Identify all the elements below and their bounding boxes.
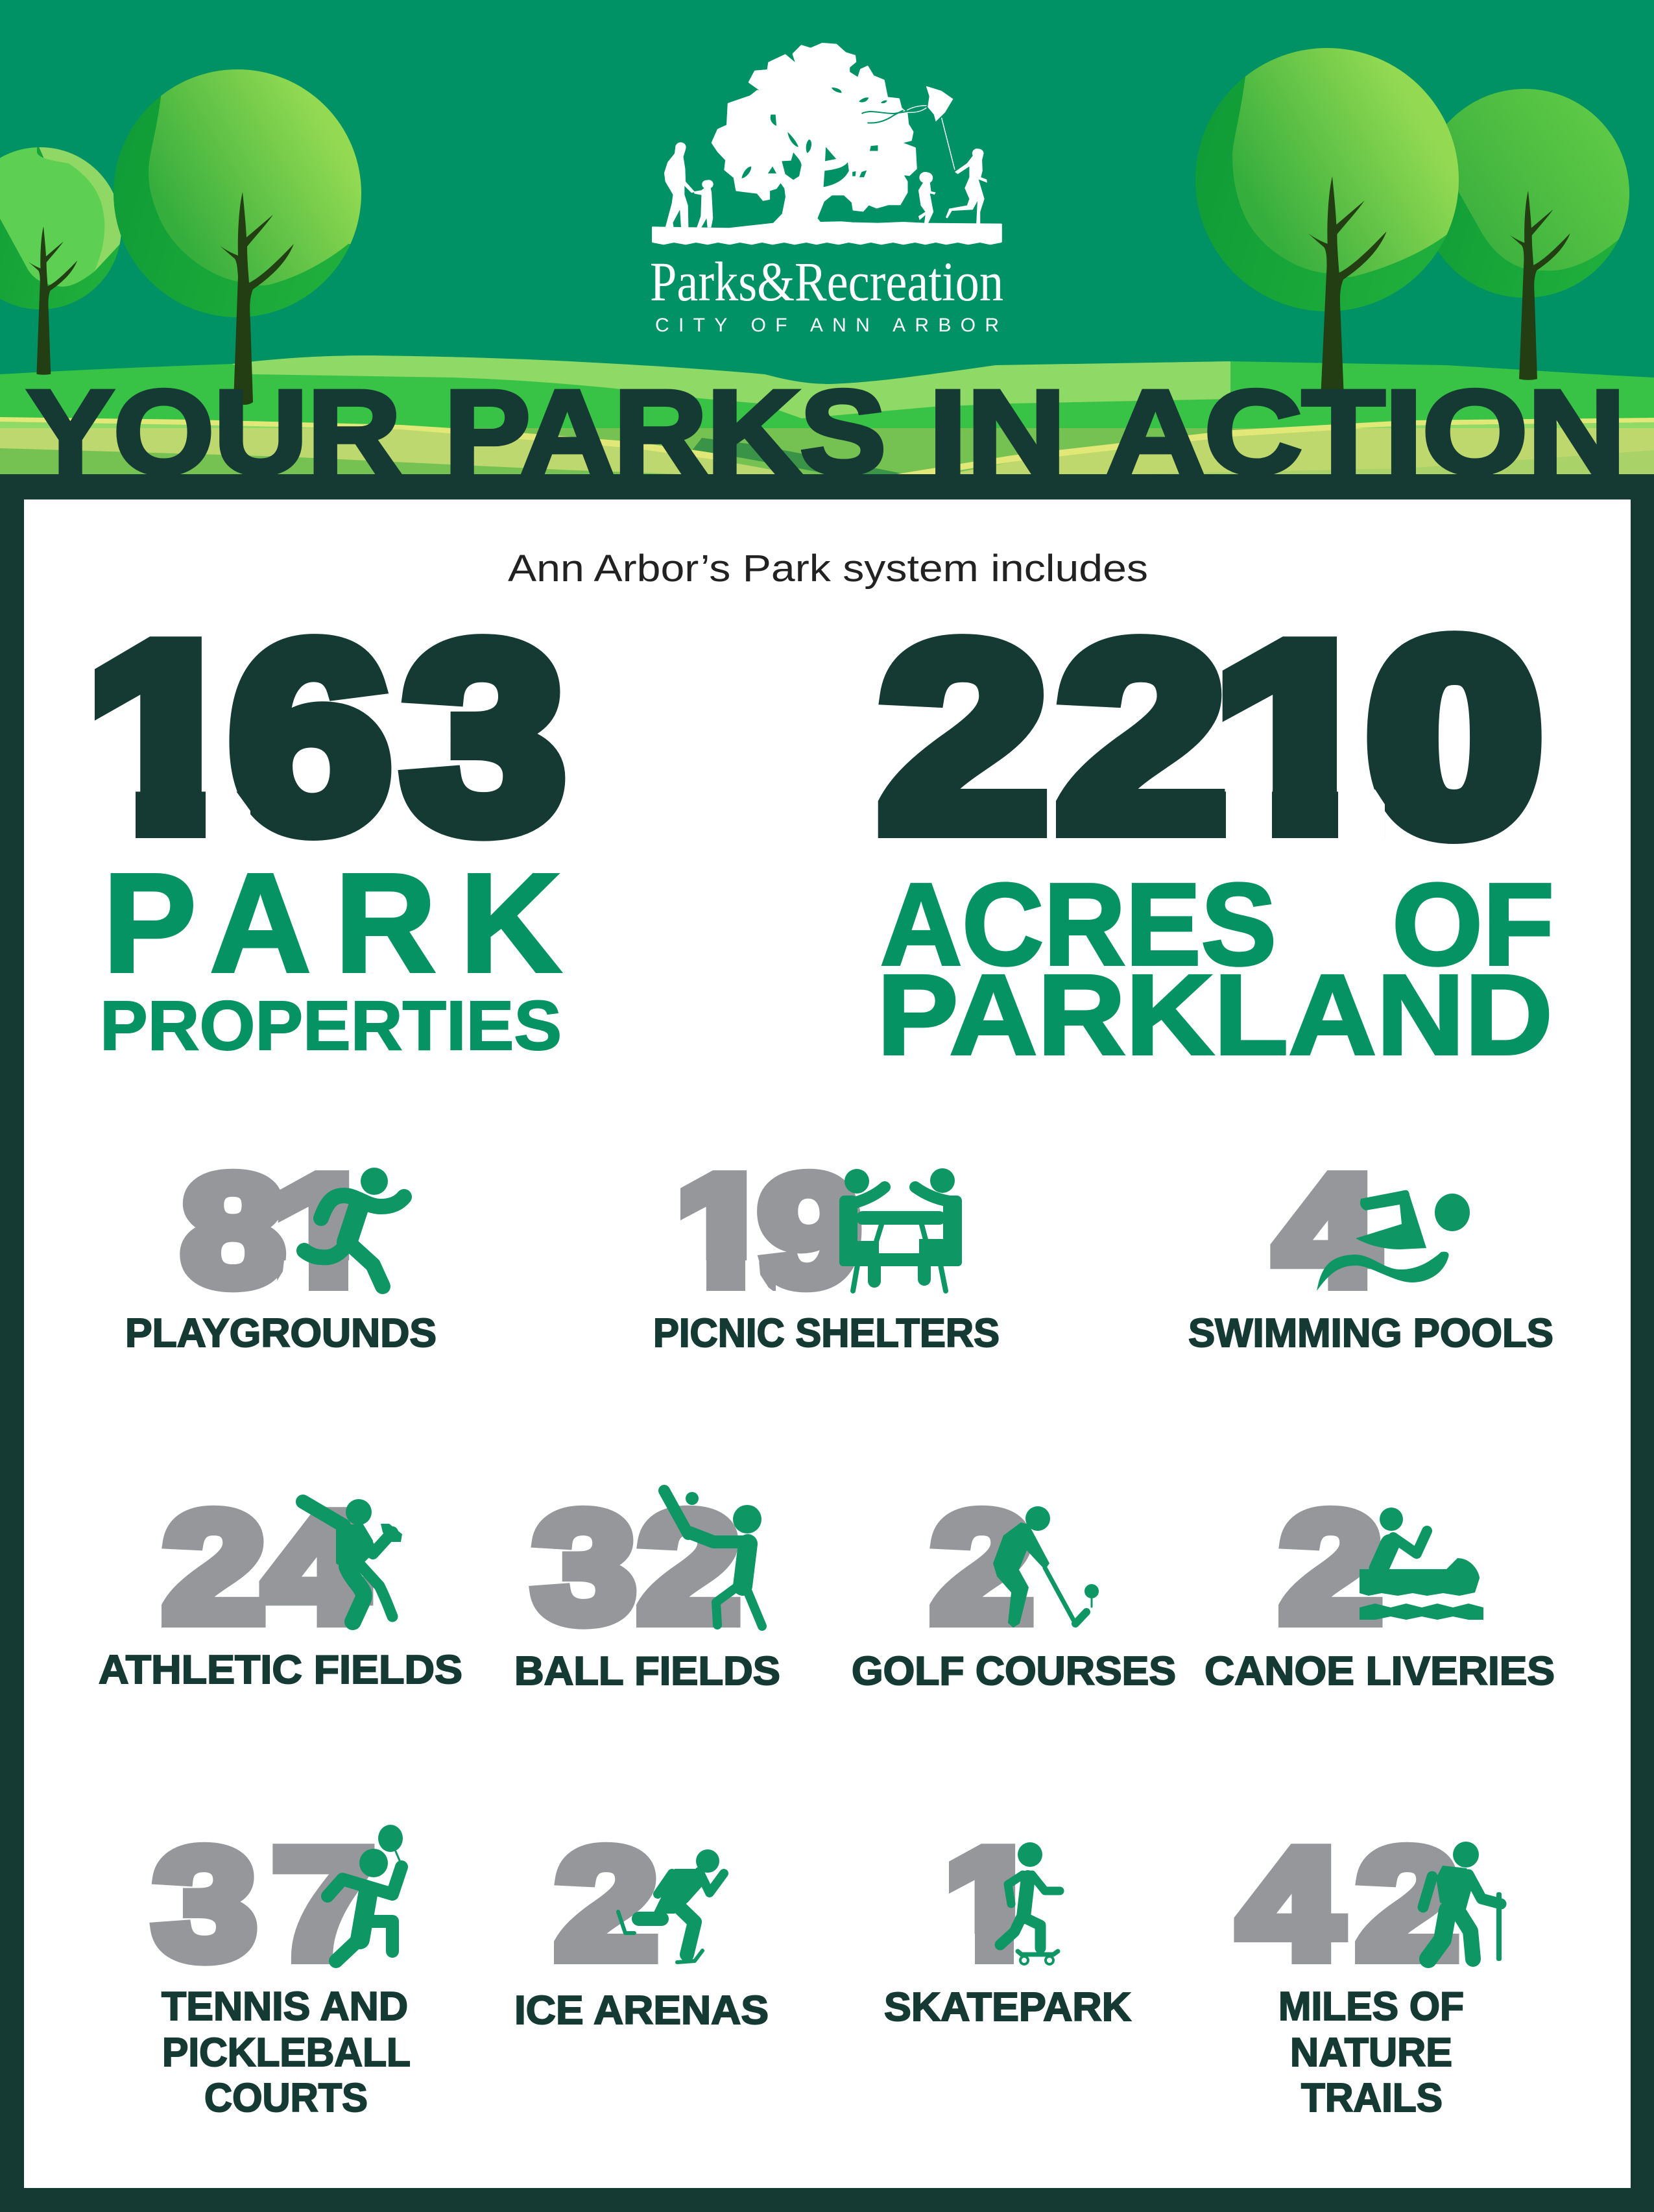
title: YOUR bbox=[27, 365, 401, 498]
label PARK: PARK bbox=[102, 845, 562, 1002]
number: 2 bbox=[1280, 1479, 1382, 1654]
small child silhouette bbox=[694, 180, 713, 228]
frame bbox=[0, 474, 1654, 2212]
icon: swimmer bbox=[1317, 1190, 1470, 1291]
stat: 163 park properties bbox=[65, 589, 565, 1064]
title: IN bbox=[929, 365, 1066, 498]
number: 37 bbox=[154, 1816, 375, 1991]
stat: 2210 acres of parkland bbox=[877, 590, 1554, 1079]
logo illustration: tree and family silhouette bbox=[653, 43, 1001, 244]
white content panel bbox=[24, 499, 1631, 2188]
number: 24 bbox=[163, 1479, 368, 1654]
logo subline: CITY OF ANN ARBOR bbox=[655, 315, 999, 336]
icon: picnic table bbox=[839, 1168, 962, 1291]
stat: 1 skatepark bbox=[884, 1816, 1131, 2030]
digit 1 cleanup bbox=[263, 1260, 396, 1295]
number 163: 163 bbox=[83, 589, 565, 885]
stat: 32 ball fields bbox=[514, 1479, 780, 1694]
stat: 19 picnic shelters bbox=[653, 1142, 1000, 1356]
label: SKATEPARK bbox=[884, 1985, 1131, 2030]
number: 2 bbox=[931, 1479, 1033, 1654]
number 2210: 0 bbox=[1370, 590, 1539, 885]
stat: 37 tennis and pickleball courts: COURTS bbox=[204, 2076, 368, 2121]
hills landscape bbox=[0, 355, 1654, 480]
stat: 37 tennis and pickleball courts bbox=[154, 1816, 411, 2121]
tree: far left bbox=[0, 143, 130, 375]
number: 81 bbox=[182, 1142, 376, 1317]
title: ACTION bbox=[1107, 365, 1625, 498]
stat: 42 miles of nature trails: TRAILS bbox=[1301, 2076, 1443, 2121]
icon: canoe bbox=[1360, 1508, 1483, 1620]
number 2210: 221 bbox=[879, 590, 1382, 885]
stat: 4 swimming pools bbox=[1188, 1142, 1553, 1356]
tree: right small bbox=[1437, 89, 1629, 380]
header background bbox=[0, 0, 1654, 506]
icon: runner bbox=[304, 1168, 404, 1286]
tree: right large bbox=[1195, 48, 1459, 389]
icon: tennis player bbox=[328, 1825, 403, 1961]
icon: ice skater bbox=[618, 1849, 724, 1962]
number: 1 bbox=[939, 1816, 1042, 1991]
stat: 2 ice arenas bbox=[514, 1816, 769, 2033]
label: PLAYGROUNDS bbox=[125, 1311, 437, 1356]
icon: golfer bbox=[993, 1506, 1099, 1628]
stat: 24 athletic fields bbox=[99, 1479, 462, 1692]
icon: batter bbox=[664, 1491, 762, 1626]
stat: 37 tennis and pickleball courts: PICKLEBALL bbox=[162, 2030, 411, 2075]
icon: athlete catching bbox=[303, 1499, 402, 1622]
digit 1 cleanup bbox=[1226, 789, 1385, 843]
logo wordmark: Parks&Recreation bbox=[650, 250, 1003, 313]
digit 1 cleanup bbox=[928, 1836, 1057, 1968]
stat: 81 playgrounds bbox=[125, 1142, 437, 1356]
adult silhouette bbox=[664, 142, 695, 228]
label: SWIMMING POOLS bbox=[1188, 1311, 1553, 1356]
icon: hiker bbox=[1423, 1842, 1502, 1961]
intro text: Ann Arbor’s Park system includes bbox=[508, 547, 1148, 590]
label: three lines: TENNIS AND bbox=[162, 1984, 408, 2029]
logo: Parks & Recreation bbox=[650, 43, 1003, 336]
digit 1 cleanup bbox=[662, 1161, 778, 1295]
label: three lines: MILES OF bbox=[1278, 1984, 1464, 2029]
label OF: OF bbox=[1392, 860, 1554, 990]
stat: 42 miles of nature trails bbox=[1239, 1816, 1502, 2121]
icon: skateboarder bbox=[1000, 1842, 1060, 1964]
label: ICE ARENAS bbox=[514, 1988, 769, 2033]
stat: 2 golf courses bbox=[852, 1479, 1176, 1694]
label PROPERTIES: PROPERTIES bbox=[100, 986, 562, 1064]
tree: left large bbox=[114, 69, 361, 405]
label: PICNIC SHELTERS bbox=[653, 1311, 1000, 1356]
stat: 42 miles of nature trails: NATURE bbox=[1290, 2030, 1452, 2075]
digit 1 cleanup bbox=[65, 623, 250, 843]
stat: 2 canoe liveries bbox=[1205, 1479, 1555, 1694]
running child bbox=[918, 172, 936, 224]
label: ATHLETIC FIELDS bbox=[99, 1648, 462, 1692]
number: 19 bbox=[671, 1142, 861, 1317]
number: 4 bbox=[1275, 1142, 1379, 1317]
number: 2 bbox=[555, 1816, 658, 1991]
girl flying kite bbox=[946, 149, 987, 224]
label: GOLF COURSES bbox=[852, 1649, 1176, 1694]
label: BALL FIELDS bbox=[514, 1649, 780, 1694]
title: PARKS bbox=[444, 365, 886, 498]
number: 32 bbox=[533, 1479, 740, 1654]
label ACRES: ACRES bbox=[880, 860, 1276, 990]
label PARKLAND: PARKLAND bbox=[877, 952, 1553, 1079]
label: CANOE LIVERIES bbox=[1205, 1649, 1555, 1694]
number: 42 bbox=[1239, 1816, 1459, 1991]
